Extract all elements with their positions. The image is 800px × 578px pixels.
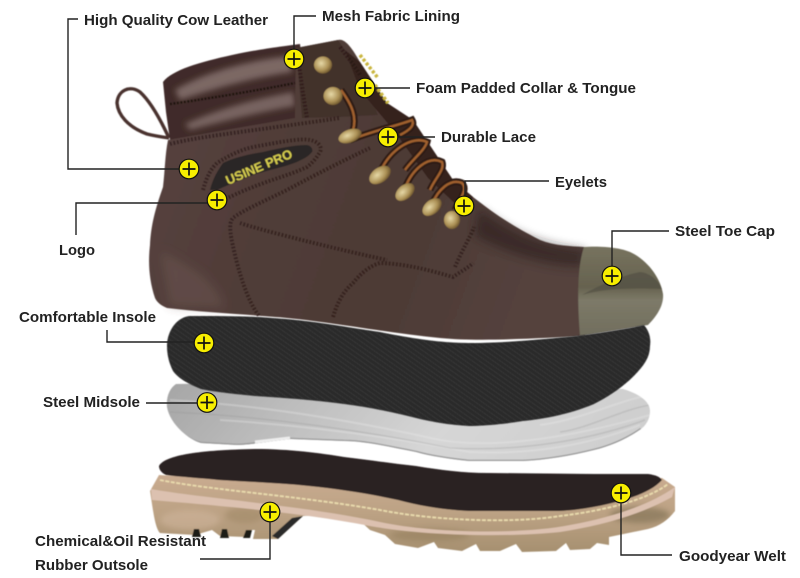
label: foam padded collar and tongue: Foam Padded Collar & Tongue [416, 80, 636, 97]
stitching [170, 118, 340, 144]
rubber sole [150, 475, 675, 552]
steel midsole [167, 380, 650, 461]
label: mesh fabric lining: Mesh Fabric Lining [322, 8, 460, 25]
outsole [150, 449, 675, 552]
welt band [151, 487, 675, 535]
marker: high quality cow leather [179, 159, 199, 179]
ankle panel shade [296, 40, 378, 118]
marker: goodyear welt [611, 483, 631, 503]
steel toe cap [578, 247, 663, 336]
logo panel [210, 145, 312, 190]
marker: midsole [197, 393, 217, 412]
label: comfortable insole: Comfortable Insole [19, 309, 156, 326]
marker: eyelets [454, 196, 474, 216]
marker: logo [207, 190, 227, 210]
marker: durable lace [378, 127, 398, 147]
dark footbed [159, 449, 662, 511]
boot upper [149, 40, 585, 340]
tongue label [360, 55, 388, 103]
marker: insole [194, 333, 214, 353]
label: rubber outsole: Rubber Outsole [35, 557, 148, 574]
label: durable lace: Durable Lace [441, 129, 536, 146]
eyelets [314, 56, 460, 229]
brushed steel streaks [170, 399, 582, 451]
steel bevel edge [188, 428, 641, 462]
rubber mottling [160, 507, 670, 541]
marker: mesh fabric lining [284, 49, 304, 69]
insole [167, 316, 650, 426]
pull loop [117, 89, 169, 138]
tongue [345, 50, 473, 214]
marker: steel toe cap [602, 266, 622, 286]
toe shadow [474, 208, 585, 266]
collar padding [163, 44, 310, 140]
boot [117, 40, 663, 340]
heel highlight [160, 250, 225, 308]
label: chemical and oil resistant: Chemical&Oil Resistant [35, 533, 206, 550]
marker: outsole [260, 502, 280, 522]
label: goodyear welt: Goodyear Welt [679, 548, 786, 565]
laces [341, 90, 464, 210]
marker: foam padded collar [355, 78, 375, 98]
welt stitching [160, 480, 668, 520]
arch shadow and lug gaps [272, 516, 303, 539]
label: eyelets: Eyelets [555, 174, 607, 191]
label: steel toe cap: Steel Toe Cap [675, 223, 775, 240]
callout lines [68, 16, 672, 559]
label: steel midsole: Steel Midsole [43, 394, 140, 411]
label: high quality cow leather: High Quality Cow Leather [84, 12, 268, 29]
logo text: USINE PRO [223, 146, 295, 188]
label: logo: Logo [59, 242, 95, 259]
